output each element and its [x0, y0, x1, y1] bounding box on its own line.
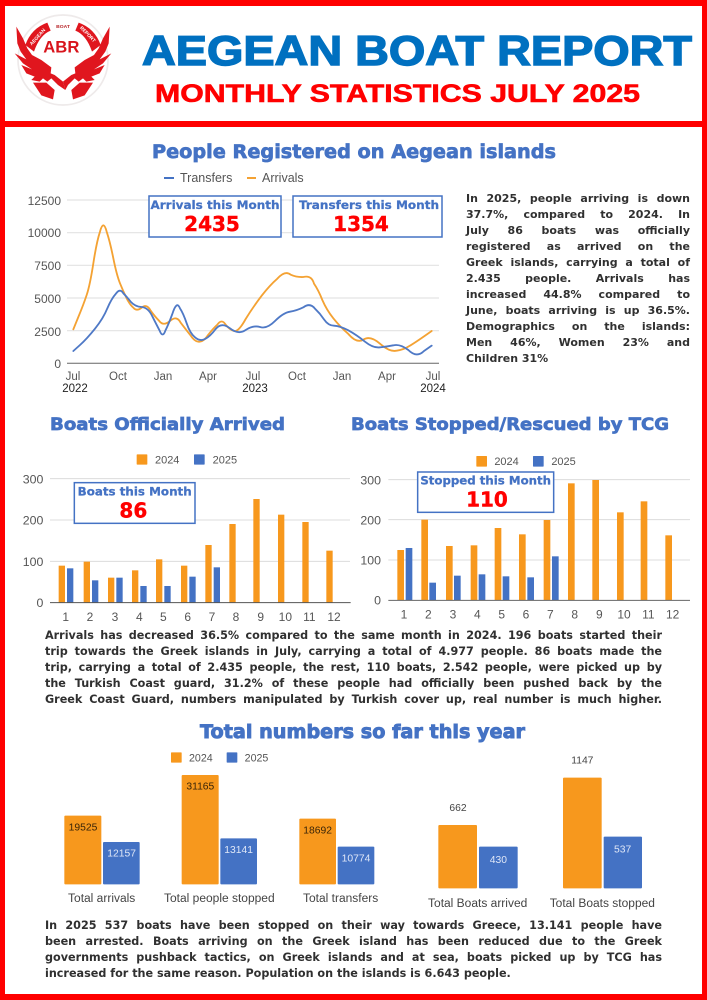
bar chart: total people — [64, 752, 378, 905]
line chart: transfers and arrivals: Apr — [378, 371, 396, 383]
text block: monthly arrivals: trip towards the Greek islands in July, carrying a total of 4.977 people. 86 boats made the — [45, 645, 662, 658]
bar chart: boats stopped — [360, 456, 690, 622]
heading: boats stopped: Boats Stopped/Rescued by TCG — [351, 415, 669, 435]
icon: ABR logo: REPORT — [78, 25, 97, 44]
text block: year to date: governments pushback tactics, on Greek islands and at sea, boats picked up by TCG has — [45, 951, 662, 964]
bar chart: boats stopped: 9 — [596, 608, 603, 622]
bars 2024 — [59, 499, 333, 603]
bar chart: total people: 19525 — [69, 823, 98, 834]
bar chart: boats stopped: 10 — [617, 608, 631, 622]
text block: year to date — [45, 919, 662, 980]
bar chart: total people: 18692 — [303, 826, 332, 837]
line chart: transfers and arrivals: 7500 — [34, 259, 61, 273]
bar chart: total boats: Total Boats stopped — [550, 896, 655, 910]
text block: monthly arrivals: trip, carrying a total of 2.435 people, the rest, 110 boats, 2.542 people, were picked up by — [45, 661, 662, 674]
chart legend: 2025 — [551, 456, 576, 468]
bar chart: boats arrived: 7 — [209, 610, 216, 624]
bar chart: total people: Total people stopped — [164, 891, 275, 905]
text block: monthly arrivals: Greek Coast Guard, numbers manipulated by Turkish cover up, real number is much higher. — [45, 693, 662, 706]
bar chart: boats arrived: 4 — [136, 610, 143, 624]
bar chart: boats arrived: 1 — [62, 610, 69, 624]
bar chart: boats stopped: 11 — [642, 608, 655, 622]
icon: ABR logo: ABR — [43, 38, 79, 57]
bar chart: boats arrived: 9 — [257, 610, 264, 624]
text block: yearly summary: Greek islands, carrying a total of — [466, 256, 690, 269]
line chart: transfers and arrivals: 0 — [54, 357, 61, 371]
bar chart: boats arrived: 6 — [184, 610, 191, 624]
chart legend: 2024 — [155, 454, 179, 466]
heading: total numbers: Total numbers so far this year — [200, 721, 526, 743]
callout: arrivals this month: Arrivals this Month — [150, 198, 280, 212]
chart legend: 2025 — [213, 454, 237, 466]
text block: year to date: In 2025 537 boats have been stopped on their way towards Greece, 13.141 people have — [45, 919, 662, 932]
bar chart: boats arrived: 10 — [279, 610, 292, 624]
bar chart: total people: 12157 — [107, 849, 136, 860]
bars 2024 — [397, 480, 672, 600]
callout: arrivals this month: 2435 — [184, 212, 240, 236]
text block: yearly summary: 37.7%, compared to 2024. In — [466, 208, 690, 221]
text block: monthly arrivals: Arrivals has decreased 36.5% compared to the same month in 2024. 196 boats started their — [45, 629, 662, 642]
line chart: transfers and arrivals: Jul — [66, 371, 80, 383]
bar chart: boats arrived: 100 — [23, 555, 43, 569]
chart legend: Arrivals — [262, 171, 304, 185]
text block: yearly summary: Demographics on the islands: — [466, 320, 690, 333]
chart legend: 2024 — [189, 752, 213, 764]
text block: year to date: been arrested. Boats arriving on the Greek island has been reduced due to the Greek — [45, 935, 662, 948]
subtitle: MONTHLY STATISTICS JULY 2025 — [155, 80, 640, 108]
callout: boats this month — [74, 483, 195, 523]
line chart: transfers and arrivals: 2023 — [242, 383, 268, 395]
chart legend: Transfers — [180, 171, 232, 185]
text block: yearly summary: Children 31% — [466, 352, 548, 365]
line chart: transfers and arrivals: 10000 — [28, 226, 61, 240]
text block: yearly summary: June, boats arriving is up 36.5%. — [466, 304, 690, 317]
bar chart: total boats: 662 — [449, 803, 467, 814]
text block: yearly summary: 2.435 people. Arrivals has — [466, 272, 690, 285]
chart legend — [137, 454, 237, 466]
line chart: transfers and arrivals: 2024 — [420, 383, 446, 395]
bar chart: boats stopped: 4 — [474, 608, 481, 622]
chart legend — [171, 752, 268, 764]
chart legend — [476, 456, 576, 468]
callout: transfers this month: 1354 — [333, 212, 389, 236]
text block: yearly summary — [465, 192, 690, 365]
bar chart: total people: 10774 — [342, 853, 371, 864]
text block: yearly summary: registered as arrived on the — [466, 240, 690, 253]
line chart: transfers and arrivals: Oct — [288, 371, 307, 383]
transfers line — [73, 291, 432, 354]
chart legend: 2024 — [494, 456, 519, 468]
bar chart: boats stopped: 100 — [360, 554, 381, 568]
line chart: transfers and arrivals: Jul — [426, 371, 440, 383]
bar chart: total boats: 537 — [614, 845, 632, 856]
heading: boats officially arrived: Boats Officially Arrived — [50, 415, 285, 435]
bar chart: boats stopped: 200 — [360, 513, 381, 527]
line chart: transfers and arrivals: Jul — [246, 371, 260, 383]
heading: people registered: People Registered on Aegean islands — [152, 142, 556, 163]
callout: arrivals this month — [149, 196, 281, 237]
bar chart: total boats — [428, 756, 655, 910]
bar chart: boats arrived: 8 — [233, 610, 240, 624]
text block: year to date: increased for the same reason. Population on the islands is 6.643 people. — [45, 967, 511, 980]
bar chart: boats arrived: 11 — [303, 610, 316, 624]
line chart: transfers and arrivals: 2022 — [62, 383, 88, 395]
callout: stopped this month: Stopped this Month — [420, 474, 551, 488]
bar chart: boats arrived: 12 — [327, 610, 341, 624]
bar chart: total people: Total transfers — [303, 891, 378, 905]
callout: boats this month: Boats this Month — [78, 485, 192, 499]
bar chart: total people: 31165 — [186, 781, 215, 792]
bars 2025 — [67, 567, 220, 603]
bar chart: boats stopped: 7 — [547, 608, 554, 622]
chart legend: 2025 — [245, 752, 268, 764]
bar chart: boats arrived: 5 — [160, 610, 167, 624]
bar chart: boats stopped: 8 — [571, 608, 578, 622]
text block: yearly summary: July 86 boats was officially — [466, 224, 690, 237]
line chart: transfers and arrivals: Jan — [154, 371, 172, 383]
callout: stopped this month: 110 — [466, 487, 508, 511]
bar chart: boats stopped: 0 — [374, 594, 381, 608]
icon: ABR logo — [15, 15, 111, 105]
line chart: transfers and arrivals — [28, 171, 446, 395]
line chart: transfers and arrivals: Apr — [199, 371, 217, 383]
bar chart: boats arrived: 3 — [112, 610, 119, 624]
bar chart: boats arrived — [23, 454, 351, 624]
line chart: transfers and arrivals: 12500 — [28, 194, 61, 208]
bar chart: boats stopped: 5 — [498, 608, 505, 622]
bar chart: total people: 13141 — [224, 845, 253, 856]
bar chart: boats stopped: 2 — [425, 608, 432, 622]
bar chart: boats arrived: 200 — [23, 514, 43, 528]
title: AEGEAN BOAT REPORT — [142, 27, 692, 74]
bar chart: total people: Total arrivals — [68, 891, 135, 905]
callout: stopped this month — [418, 472, 554, 512]
icon: ABR logo: AEGEAN — [29, 27, 47, 47]
line chart: transfers and arrivals: 2500 — [34, 325, 61, 339]
callout: transfers this month: Transfers this Month — [299, 198, 439, 212]
bar chart: total boats: Total Boats arrived — [428, 896, 527, 910]
text block: monthly arrivals — [45, 629, 662, 706]
line chart: transfers and arrivals: Oct — [109, 371, 128, 383]
text block: monthly arrivals: the Turkish Coast guard, 31.2% of these people had officially been pushed back by the — [45, 677, 662, 690]
bar chart: boats stopped: 300 — [360, 473, 381, 487]
bar chart: boats stopped: 1 — [401, 608, 408, 622]
bar chart: boats arrived: 300 — [23, 472, 43, 486]
bar chart: boats stopped: 12 — [666, 608, 680, 622]
chart legend — [164, 171, 304, 185]
text block: yearly summary: In 2025, people arriving is down — [466, 192, 690, 205]
bar chart: total boats: 430 — [490, 855, 507, 866]
bar chart: boats stopped: 3 — [450, 608, 457, 622]
bar chart: total boats: 1147 — [571, 756, 594, 767]
text block: yearly summary: increased 44.8% compared to — [466, 288, 690, 301]
bar chart: boats arrived: 2 — [87, 610, 94, 624]
callout: transfers this month — [293, 196, 442, 237]
bar chart: boats stopped: 6 — [523, 608, 530, 622]
callout: boats this month: 86 — [119, 498, 147, 522]
bars 2025 — [406, 548, 559, 600]
arrivals line — [73, 225, 432, 351]
icon: ABR logo: BOAT — [56, 24, 70, 30]
text block: yearly summary: Men 46%, Women 23% and — [466, 336, 690, 349]
bar chart: boats arrived: 0 — [36, 596, 43, 610]
line chart: transfers and arrivals: Jan — [333, 371, 351, 383]
line chart: transfers and arrivals: 5000 — [34, 292, 61, 306]
